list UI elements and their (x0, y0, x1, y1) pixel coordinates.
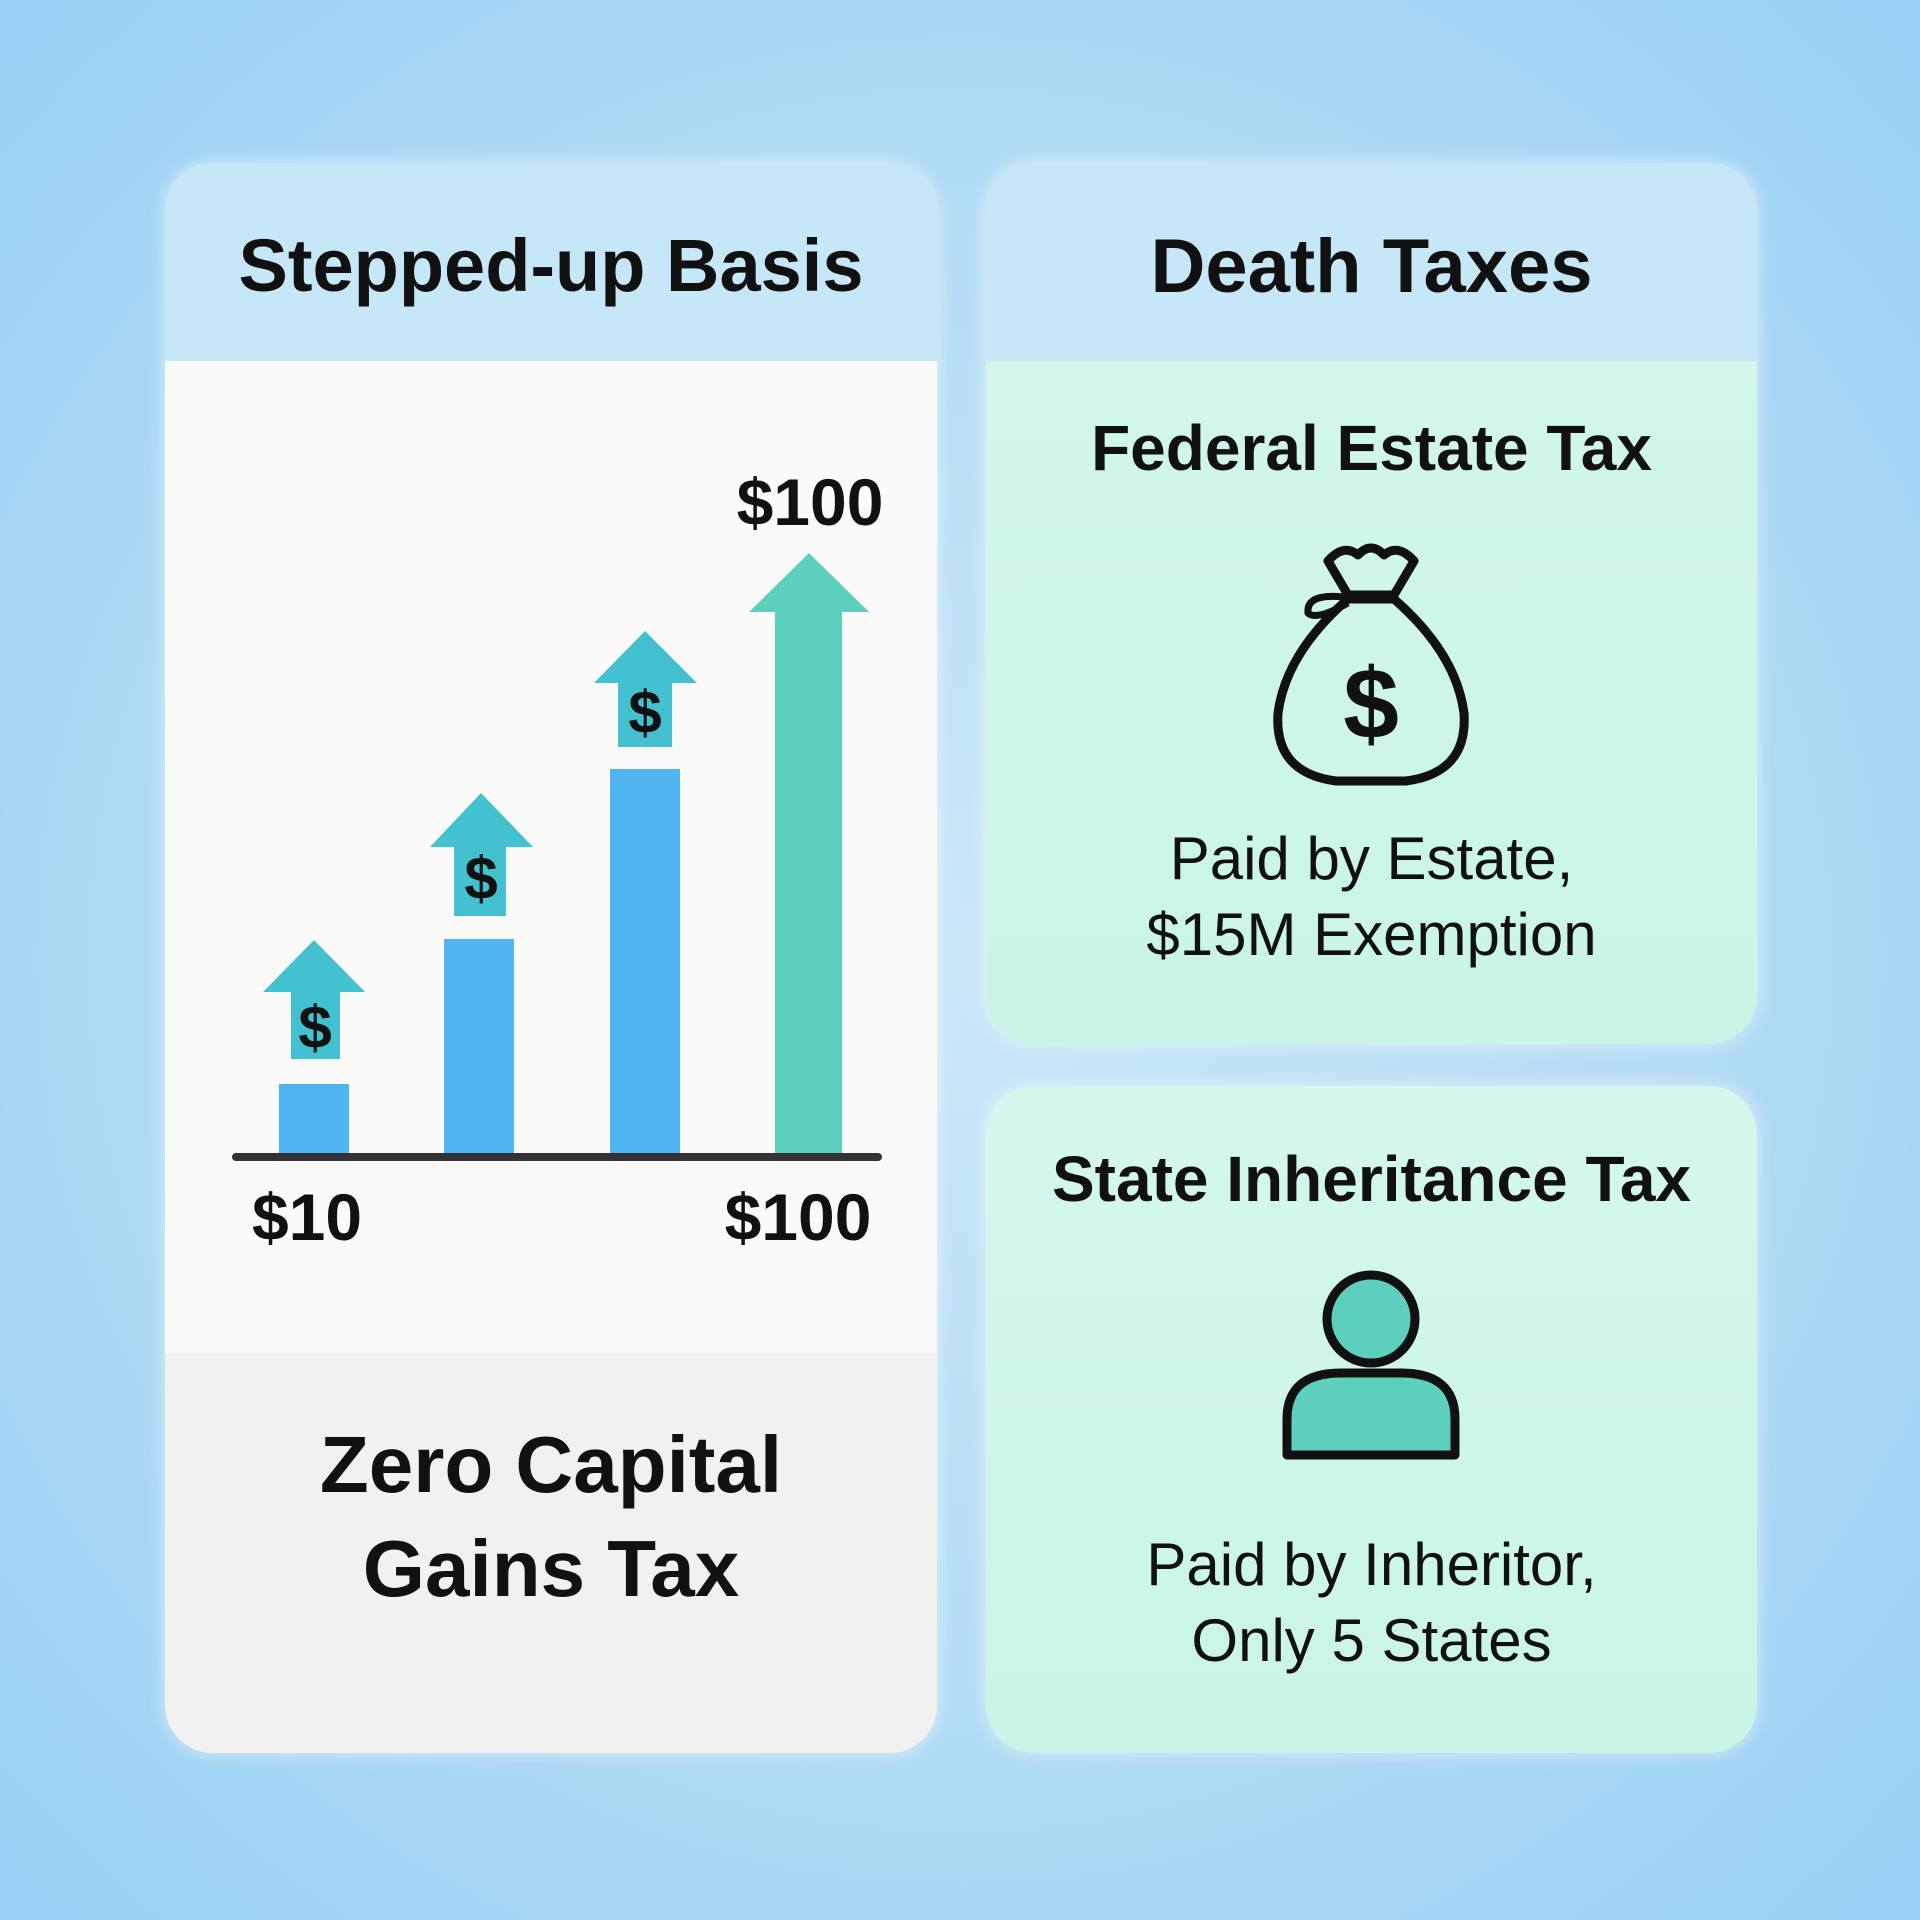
text: paid by estate: $15M Exemption (1146, 901, 1597, 968)
arrow 2 (430, 793, 533, 916)
heading: stepped-up basis: Stepped-up Basis (238, 224, 864, 307)
header band (986, 163, 1757, 361)
heading: death taxes: Death Taxes (1150, 224, 1593, 309)
baseline (232, 1153, 882, 1161)
arrow 2: $ (464, 845, 498, 912)
text: paid by estate (1146, 825, 1597, 968)
arrow 3: $ (628, 679, 662, 746)
label: $10: $10 (252, 1180, 362, 1254)
text: zero capital gains tax: Gains Tax (363, 1524, 739, 1613)
icon: person (1282, 1270, 1460, 1460)
label: $100 bottom: $100 (725, 1180, 871, 1254)
bar 3 (610, 769, 680, 1157)
bar 1 (279, 1084, 349, 1157)
text: paid by inheritor: Only 5 States (1191, 1607, 1552, 1674)
text: paid by inheritor (1146, 1531, 1597, 1674)
text: zero capital gains tax: Zero Capital (320, 1420, 782, 1509)
label: $100 top: $100 (737, 465, 883, 539)
text: paid by inheritor: Paid by Inheritor, (1146, 1531, 1597, 1598)
arrow 1: $ (298, 994, 332, 1061)
panel: state inheritance tax (986, 1086, 1757, 1753)
subheading: state inheritance tax: State Inheritance Tax (1052, 1143, 1691, 1215)
chart area (165, 361, 937, 1353)
icon: money bag: $ (1343, 648, 1399, 760)
header band (165, 163, 937, 361)
subheading: federal estate tax: Federal Estate Tax (1091, 412, 1652, 484)
icon: money bag (1273, 544, 1469, 786)
text: zero capital gains tax (320, 1420, 782, 1613)
arrow 1 (263, 940, 365, 1061)
arrow 3 (594, 631, 697, 747)
bar 4 green arrow (749, 553, 869, 1157)
bottom section (165, 1353, 937, 1753)
panel: stepped-up basis (165, 163, 937, 1753)
text: paid by estate: Paid by Estate, (1170, 825, 1573, 892)
panel: death taxes (986, 163, 1757, 1044)
bar 2 (444, 939, 514, 1157)
